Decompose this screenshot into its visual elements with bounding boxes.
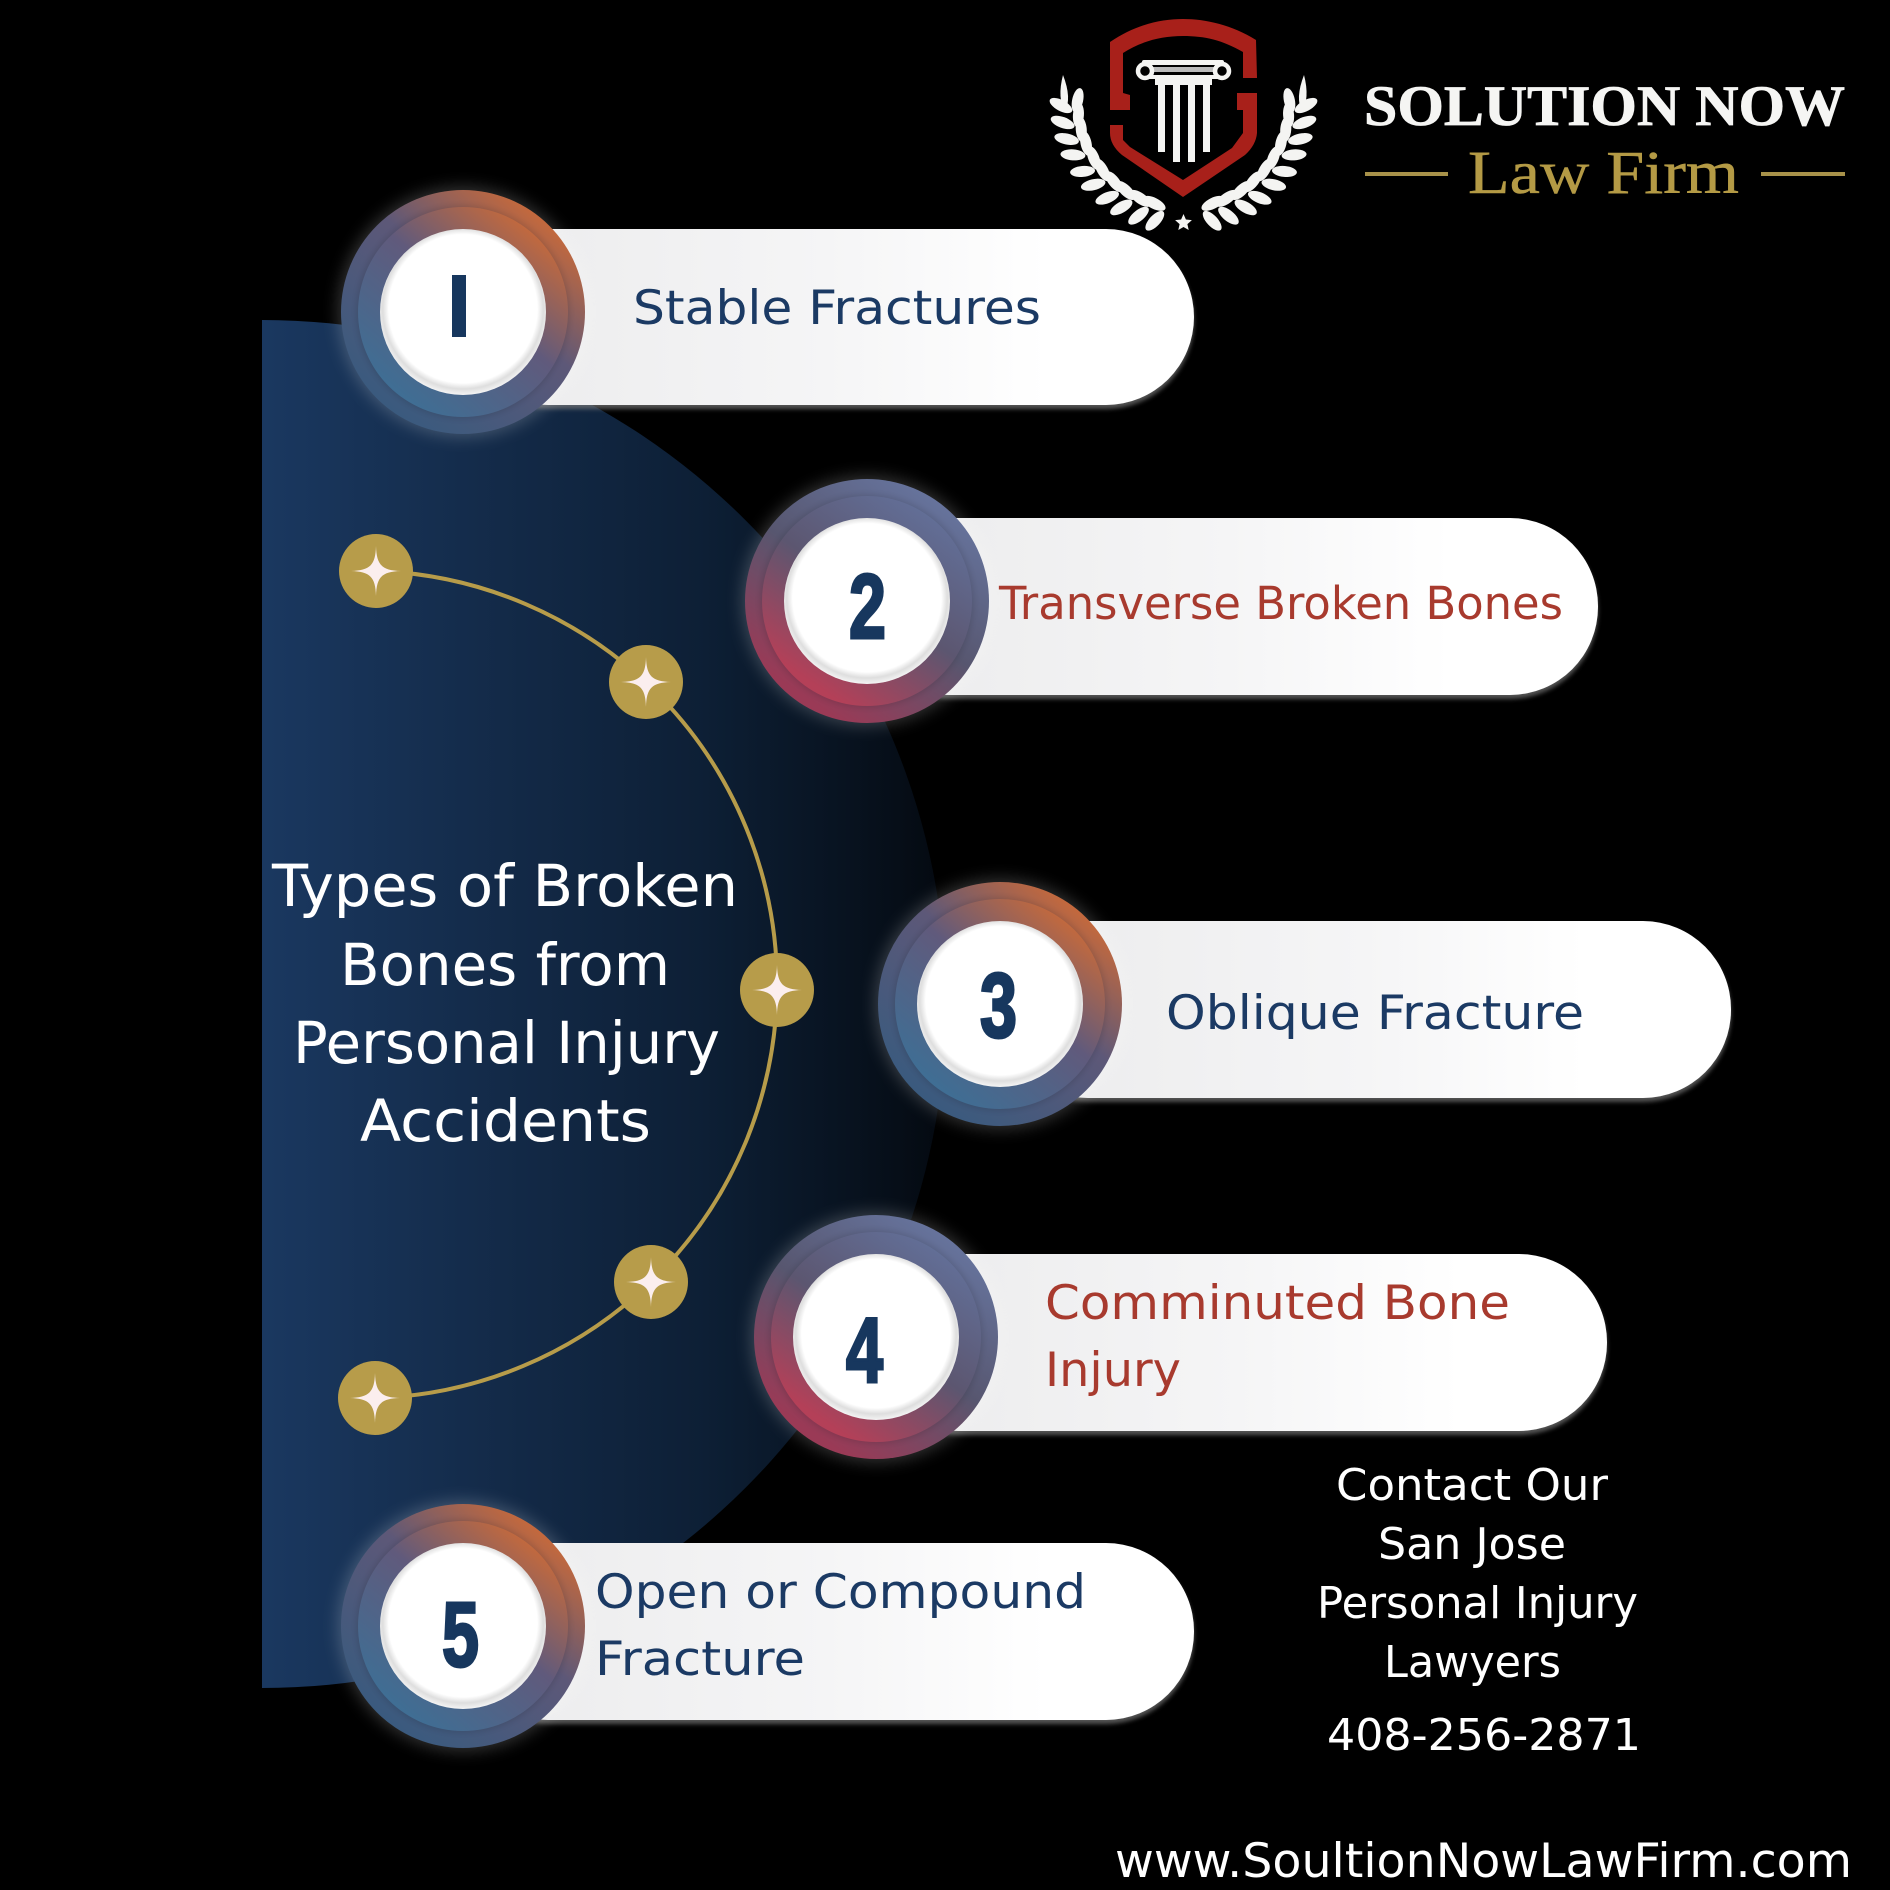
badge: 3 <box>980 955 1017 1057</box>
pill <box>860 518 1598 695</box>
badge: 5 <box>442 1584 479 1686</box>
item 1 <box>338 187 1194 437</box>
item 2 <box>742 476 1598 726</box>
label <box>1045 1276 1510 1398</box>
title: Accidents <box>360 1087 651 1155</box>
pill <box>460 229 1194 405</box>
label: Oblique Fracture <box>1166 986 1584 1041</box>
node: sparkle 5 <box>338 1361 412 1435</box>
label <box>595 1565 1086 1687</box>
logo wordmark <box>1364 75 1845 207</box>
item 4 <box>751 1212 1607 1462</box>
logo emblem <box>1046 19 1321 236</box>
badge: 2 <box>849 556 886 658</box>
pill <box>1000 921 1731 1098</box>
badge <box>338 187 588 437</box>
node: sparkle 4 <box>614 1245 688 1319</box>
title <box>271 852 738 1155</box>
label: Comminuted Bone <box>1045 1276 1510 1331</box>
panel: blue semicircle <box>262 320 946 1688</box>
logo wordmark: Law Firm <box>1468 140 1739 207</box>
label: Injury <box>1045 1343 1181 1398</box>
title: Bones from <box>340 931 670 999</box>
label: Stable Fractures <box>633 281 1041 336</box>
pillar <box>1138 60 1229 162</box>
website: www.SoultionNowLawFirm.com <box>1115 1834 1852 1889</box>
node: sparkle 3 <box>740 953 814 1027</box>
badge <box>742 476 992 726</box>
title: Personal Injury <box>293 1009 720 1077</box>
star <box>1175 214 1192 230</box>
label: Transverse Broken Bones <box>998 577 1563 630</box>
contact block: San Jose <box>1378 1519 1566 1570</box>
pill <box>870 1254 1607 1431</box>
label: Fracture <box>595 1632 805 1687</box>
contact block: 408-256-2871 <box>1327 1710 1641 1761</box>
badge <box>338 1501 588 1751</box>
shield <box>1110 19 1257 197</box>
laurel left <box>1046 75 1171 236</box>
contact block <box>1317 1460 1641 1761</box>
badge: 1 <box>432 255 483 357</box>
item 3 <box>875 879 1731 1129</box>
badge <box>751 1212 1001 1462</box>
contact block: Lawyers <box>1384 1637 1561 1688</box>
badge: 4 <box>846 1300 883 1402</box>
item 5 <box>338 1501 1194 1751</box>
contact block: Contact Our <box>1336 1460 1609 1511</box>
label: Open or Compound <box>595 1565 1086 1620</box>
node: sparkle 2 <box>609 645 683 719</box>
title: Types of Broken <box>271 852 738 920</box>
laurel right <box>1196 75 1321 236</box>
node: sparkle 1 <box>339 534 413 608</box>
logo wordmark: SOLUTION NOW <box>1364 75 1845 138</box>
pill <box>460 1543 1194 1720</box>
badge <box>875 879 1125 1129</box>
gold arc timeline <box>338 534 814 1435</box>
contact block: Personal Injury <box>1317 1578 1638 1629</box>
